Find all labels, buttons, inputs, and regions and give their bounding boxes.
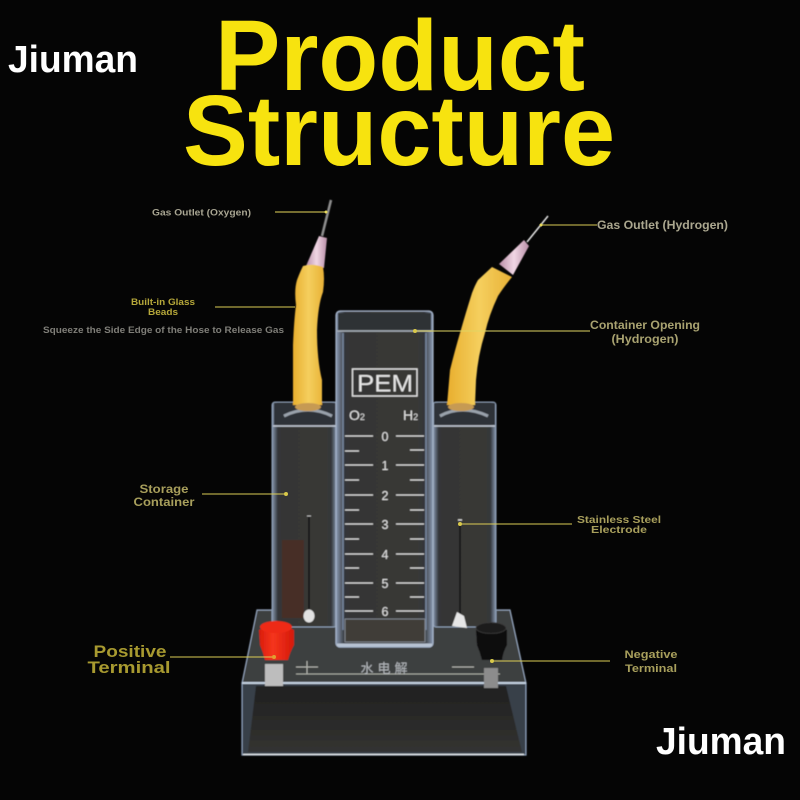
title: Product [215,0,585,112]
central PEM tube [336,311,433,647]
left hose [293,200,331,411]
scale marks [345,436,424,611]
callout: stainless steel electrode: Electrode [591,524,647,536]
scale numbers: 5 [382,577,389,591]
scale numbers: 6 [382,605,389,619]
callout: storage container: Storage [140,484,188,496]
title [183,0,615,187]
callout: positive terminal [88,642,276,677]
right storage container [433,402,496,628]
left storage container [272,402,337,627]
callout: gas outlet hydrogen [540,220,728,232]
gas labels: O2 [349,407,365,423]
callout: stainless steel electrode [458,514,661,536]
scale numbers: 3 [382,518,389,532]
scale numbers: 2 [382,489,389,503]
title: Structure [183,75,615,187]
callout: negative terminal [490,649,678,675]
watermark bottom right: Jiuman [656,721,786,763]
watermark top left: Jiuman [8,39,138,81]
callout: negative terminal: Terminal [625,663,677,675]
note: squeeze hose: Squeeze the Side Edge of the Hose to Release Gas [43,325,284,336]
scale numbers: 4 [382,548,389,562]
base [242,610,526,755]
callout: gas outlet oxygen [152,208,328,218]
PEM label: PEM [357,370,413,398]
red positive terminal [259,621,294,686]
scale numbers: 1 [382,459,389,473]
callout: built-in glass beads: Beads [148,307,178,317]
callout: gas outlet oxygen: Gas Outlet (Oxygen) [152,208,251,218]
callout: container opening hydrogen: (Hydrogen) [612,334,679,346]
scale numbers: 0 [382,430,389,444]
callout: positive terminal: Positive [94,642,166,661]
callout: built-in glass beads: Built-in Glass [131,297,195,307]
callout: storage container: Container [134,497,195,509]
electrolysis apparatus [242,200,548,755]
callout: storage container [134,484,288,509]
callout: positive terminal: Terminal [88,658,170,677]
callout: stainless steel electrode: Stainless Steel [577,514,661,526]
callout: built-in glass beads [131,297,295,317]
black negative terminal [476,622,507,688]
right hose [447,216,548,411]
callout: gas outlet hydrogen: Gas Outlet (Hydrogen) [597,220,728,232]
scale numbers [382,430,389,619]
callout: container opening hydrogen: Container Opening [590,320,700,332]
gas labels: H2 [403,407,418,423]
base characters: 水电解 [360,661,412,676]
callout: negative terminal: Negative [624,649,678,661]
callout: container opening hydrogen [413,320,700,346]
gas labels [349,407,418,423]
